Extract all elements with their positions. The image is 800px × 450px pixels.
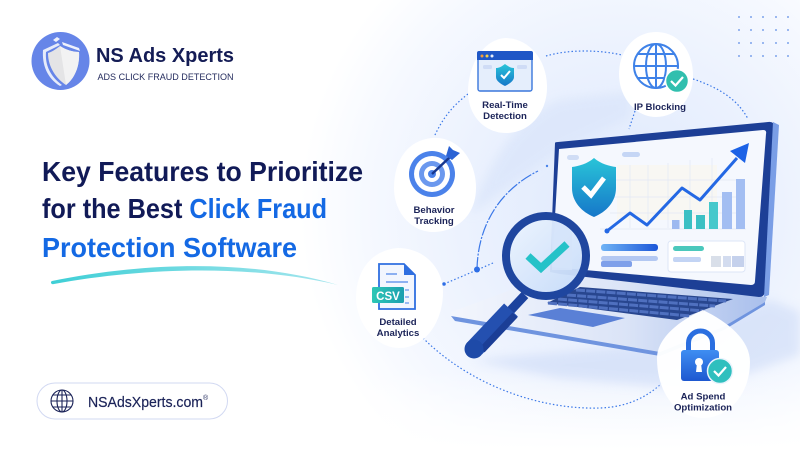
icon: globe bbox=[634, 44, 678, 88]
node label: Analytics bbox=[377, 328, 419, 339]
icon: screen shield bbox=[572, 158, 616, 217]
icon: browser window bbox=[477, 51, 533, 91]
title bbox=[42, 156, 363, 263]
node label: Detailed bbox=[379, 317, 417, 328]
icon: CSV file: CSV bbox=[376, 291, 400, 303]
node label: IP Blocking bbox=[634, 102, 686, 113]
node label: Behavior bbox=[413, 205, 455, 216]
chart top pills bbox=[567, 152, 640, 160]
feature: Behavior Tracking bbox=[394, 138, 476, 232]
title: Protection Software bbox=[42, 232, 297, 263]
icon: checkmark in lens bbox=[528, 244, 567, 268]
node bubble bbox=[657, 310, 750, 418]
icon: padlock bbox=[681, 331, 719, 381]
feature: IP Blocking bbox=[619, 32, 693, 117]
node bubble bbox=[356, 248, 443, 348]
registered mark: ® bbox=[203, 394, 209, 402]
node bubble bbox=[468, 38, 547, 133]
laptop screen bbox=[552, 130, 766, 285]
node bubble bbox=[619, 32, 693, 117]
rim bbox=[506, 216, 586, 296]
brand tagline: ADS CLICK FRAUD DETECTION bbox=[98, 72, 234, 83]
icon: check badge bbox=[708, 358, 732, 384]
dot grid decoration bbox=[738, 16, 789, 57]
logo badge bbox=[32, 32, 90, 90]
icon: target bbox=[409, 146, 460, 197]
connector dotted orbit bbox=[423, 51, 748, 408]
feature: Ad Spend Optimization bbox=[657, 310, 750, 418]
handle bbox=[464, 295, 525, 358]
website address: NSAdsXperts.com bbox=[88, 394, 203, 411]
node label: Real-Time bbox=[482, 100, 528, 111]
title: for the Best Click Fraud bbox=[42, 193, 327, 224]
node label: Ad Spend bbox=[681, 392, 726, 402]
website pill bbox=[37, 383, 228, 419]
screen data card bbox=[668, 241, 745, 272]
icon: globe bbox=[51, 390, 73, 412]
node label: Tracking bbox=[414, 216, 454, 227]
feature: Real-Time Detection bbox=[468, 38, 547, 133]
feature: Detailed Analytics bbox=[356, 248, 443, 348]
laptop screen bezel bbox=[550, 122, 775, 297]
node label: Detection bbox=[483, 111, 527, 122]
node label: Optimization bbox=[674, 402, 732, 414]
laptop bbox=[451, 122, 800, 390]
magnifying glass bbox=[464, 216, 586, 358]
node bubble bbox=[394, 138, 476, 232]
brand name: NS Ads Xperts bbox=[96, 45, 234, 67]
chart grid bbox=[600, 158, 746, 229]
title underline swoosh bbox=[51, 266, 338, 285]
bar chart bbox=[672, 179, 745, 229]
trend arrow bbox=[604, 143, 749, 234]
icon: check badge bbox=[666, 70, 688, 92]
screen progress bars bbox=[601, 244, 658, 267]
logo bbox=[32, 32, 234, 90]
lens bbox=[506, 216, 586, 296]
title: Key Features to Prioritize bbox=[42, 156, 363, 187]
laptop shadow bbox=[470, 300, 800, 390]
laptop base bbox=[451, 272, 767, 356]
